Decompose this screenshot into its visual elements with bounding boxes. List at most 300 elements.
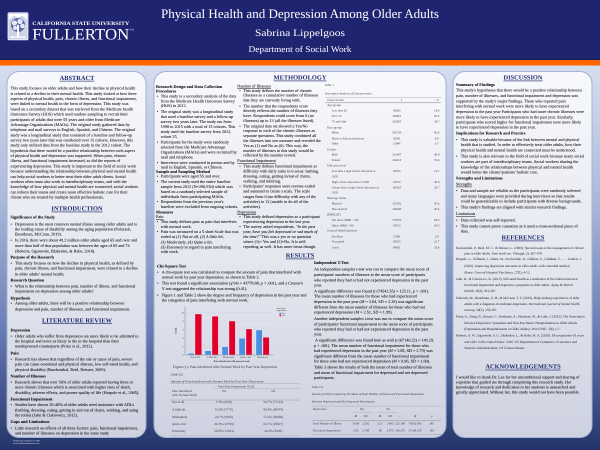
table 1: descriptive characteristics: 89601 [393, 245, 401, 249]
table 1: descriptive characteristics: Very good [332, 240, 345, 244]
table 1: descriptive characteristics: Obese (BMI > 30) [332, 223, 354, 227]
discussion text: Implications for Research and Practice [456, 131, 526, 136]
methodology column one: from the Medicare Health Outcomes Survey [161, 98, 236, 103]
discussion text: Strengths [456, 182, 472, 187]
methodology column one: based on a randomly selected sample of [161, 189, 228, 194]
table 1: descriptive characteristics: Education level [327, 164, 346, 168]
literature review text: Depression [10, 327, 31, 332]
table 1: descriptive characteristics: Excellent [332, 234, 343, 238]
table 2: pain by depression: 89.4% (60479) [263, 408, 283, 412]
methodology column one: Participants for the study were randomly [161, 140, 230, 145]
discussion text: participants who scored higher for functional impairment were more likely [456, 120, 582, 125]
abstract text: survey two years later that was conducted over 15 cohorts. However, this [10, 138, 133, 142]
independent t test text: who reported they had or had not experienced depression in the past [314, 326, 429, 331]
bar chart: pain interfered with normal work by depression: Pain interfered with normal work [214, 360, 250, 363]
discussion text: more likely to have experienced depression in the past year. Similarly, [456, 114, 574, 119]
table 1: descriptive characteristics: Race groups [327, 125, 343, 129]
chi-square test text: Chi-Square Test [157, 263, 187, 268]
methodology column one: survey two years later. The study ran from [161, 119, 232, 124]
independent t test text: participants' numbers of illnesses to the mean score of participants [314, 272, 425, 277]
table 3: t-test comparison: 74542.954 [409, 421, 422, 425]
table 3: t-test comparison: 67148.218 [409, 428, 422, 432]
table 1: descriptive characteristics: 30.8 [434, 180, 440, 184]
methodology column two: Participants' responses were reverse-coded [243, 184, 316, 189]
independent t test text: significant different from the mean number of functional impairment [314, 353, 430, 358]
discussion text: Strengths and Limitations [456, 176, 503, 181]
chi-square test text: normal work by past year depression, as shown in Table 2. [162, 275, 260, 280]
discussion text: workers are part of interdisciplinary teams. Social workers sharing the [461, 159, 579, 164]
methodology column one: with work. [161, 249, 179, 254]
discussion text: physical health and mental health are connected must be understood. [461, 147, 576, 152]
methodology column one: Sample and Sampling Method [156, 169, 211, 174]
table 1: descriptive characteristics: GED [332, 191, 339, 195]
chi-square test text: • [157, 281, 159, 286]
literature review text: Older adults who suffer from depression are more likely to be admitted to [15, 333, 138, 338]
table 1: descriptive characteristics: 14.9 [434, 109, 440, 113]
methodology column two: The original data set showed a Yes/No [243, 123, 308, 128]
table 1: descriptive characteristics: 129240 [392, 207, 402, 211]
table 2: pain by depression: Table (2) [171, 372, 183, 376]
footer credit: TEMPLATE DESIGN © 2008 [13, 440, 40, 442]
methodology column two: year, have you felt depressed or sad much of [242, 229, 318, 234]
methodology column two: illnesses) up to 13 (all the illnesses listed). [243, 118, 314, 123]
introduction text: Depression is the most common mental illness among older adults and is [15, 221, 137, 226]
panel: left column [7, 72, 146, 438]
introduction text [10, 215, 138, 311]
reference list: Prina, A., Deng, B., Brayne, C., Beekman, A., Huisman, M., & Luke, J. (2012). The Association [456, 314, 585, 318]
table 2: pain by depression: 5.3% (4042) [216, 400, 232, 404]
introduction text: Significance of the Study [10, 215, 56, 220]
chi-square test text [157, 263, 307, 302]
independent t test text: year. [314, 332, 322, 337]
table 2: pain by depression: 75.3% (30686) [263, 415, 283, 419]
discussion text: depression in the past year Participants who had more chronic illnesses were [456, 109, 584, 114]
methodology column two: and summed to create a scale. The scale [243, 189, 310, 194]
literature review text: • [10, 425, 12, 430]
table 3: t-test comparison: .96 [378, 428, 382, 432]
bar chart: pain interfered with normal work by depression: 4 [183, 337, 185, 340]
header banner [0, 0, 600, 66]
table 1: descriptive characteristics: 103393 [392, 120, 402, 124]
methodology column two: Functional Impairment [237, 158, 277, 163]
table 1: descriptive characteristics: 149961 [392, 114, 402, 118]
discussion text: to have experienced depression in the past year. [456, 125, 536, 130]
table 3: t-test comparison: 1.875 [387, 428, 394, 432]
methodology column one: This study defines pain as pain that interferes [161, 219, 237, 224]
reference list: Jahn, D., & Cukrowicz, K. (2012). Self-rated health as a moderator of the relation between [456, 277, 578, 281]
independent t test text: participants. [314, 375, 335, 380]
table 1: descriptive characteristics: 44266 [393, 109, 401, 113]
methodology column one: • [157, 174, 159, 179]
methodology column two: The survey asked respondents, "In the past [243, 224, 316, 229]
table 3: t-test comparison: t [400, 414, 401, 418]
methodology column two: activities) to 12 (unable to do all of the [243, 199, 309, 204]
discussion text: • [456, 223, 458, 228]
reference list: adults with a diagnosis of moderate depression. International journal of mental health [464, 302, 580, 306]
bar chart: pain interfered with normal work by depression: No [282, 314, 286, 317]
table 1: descriptive characteristics: Black or African American [332, 136, 365, 140]
methodology column one [156, 84, 239, 254]
methodology column one: baseline were excluded from ongoing cohorts. [161, 204, 238, 209]
introduction text: depression and pain, number of illnesses, and functional impairment. [15, 306, 130, 311]
icon: university seal with tree [8, 13, 28, 40]
table 3: t-test comparison: 2.788 [362, 428, 370, 432]
table 1: descriptive characteristics: Greater than a high school education or [332, 185, 379, 189]
table 1: descriptive characteristics: 55.4 [434, 158, 440, 162]
table 1: descriptive characteristics: General Health Question [327, 229, 358, 233]
table 3: t-test comparison: Results of T-Test Comparing the Mean of Total Number of Illness and Functional Impairment [311, 392, 424, 396]
methodology column two: have. Respondents could score from 0 (no [243, 113, 314, 118]
methodology column one: mail and telephone. [161, 155, 194, 160]
reference list [456, 246, 585, 350]
literature review text: • [10, 356, 12, 361]
methodology column two: The number that the respondents score [243, 103, 308, 108]
discussion text: Data collected was self-reported. [461, 217, 516, 222]
independent t test text: who reported they had or had not experienced depression in the past [314, 277, 429, 282]
table 1: descriptive characteristics: Good [332, 245, 339, 249]
table 3: t-test comparison: SD [364, 414, 368, 418]
discussion text [456, 82, 585, 233]
table 1: descriptive characteristics: 63913 [393, 223, 401, 227]
methodology column two: Number of Illnesses [237, 83, 271, 88]
literature review text: Number of Illnesses [10, 373, 46, 378]
methodology column one: that used a baseline survey and a follow-up [161, 114, 233, 119]
methodology column one: The current study used the entire baseline [161, 179, 231, 184]
literature review text: pain can cause emotional and physical distress, low self-rated health, and [15, 362, 138, 367]
introduction text: • [10, 301, 12, 306]
table 1: descriptive characteristics: 34.7 [434, 120, 440, 124]
heading: discussion: DISCUSSION [503, 75, 543, 82]
discussion text: and many languages were provided during interviews so that results [461, 193, 575, 198]
table 1: descriptive characteristics: 173375 [392, 218, 402, 222]
methodology column two: reflected by the number scored. [243, 153, 296, 158]
literature review text: physical disability (Brackenthal, Reid, Reisner, 2009). [15, 367, 106, 372]
methodology column two: • [239, 123, 241, 128]
table 2: pain by depression: Moderately [172, 415, 188, 419]
methodology column one: mail in English, Spanish, or Chinese. [161, 165, 223, 170]
literature review text: nondepressed counterparts (Prina et al., 2012). [15, 343, 93, 348]
chi-square test text: • [157, 269, 159, 274]
table 1: descriptive characteristics: 8.9 [435, 136, 439, 140]
literature review text: and number of illnesses on depression in the same study [15, 431, 110, 436]
methodology column one: • [157, 140, 159, 145]
independent t test text: different from the mean number of illnesses for those who had not [314, 304, 426, 309]
abstract text: workers often must also work in interdisciplinary teams, and with the [10, 179, 127, 184]
heading: literature review: LITERATURE REVIEW [42, 317, 113, 324]
introduction text: What is the relationship between pain, number of illness, and functional [15, 283, 136, 288]
table 1: descriptive characteristics: Less than 65 [332, 109, 347, 113]
table 2: pain by depression: with Normal Work [172, 393, 197, 397]
table 2: pain by depression: Past Year Depression % (f) [218, 384, 254, 388]
table 1: descriptive characteristics: GED [332, 175, 339, 179]
reference list: Statistics Administration, US Census Bureau. [464, 346, 525, 350]
methodology column one: • [157, 94, 159, 99]
reference list: between Depressive Symptoms and Non-Psychiatric Hospitalisation in Older Adults. [464, 321, 578, 325]
logo wordmark: CALIFORNIA STATE UNIVERSITY [32, 21, 130, 27]
literature review text: Functional Impairment [10, 396, 53, 401]
table 3: t-test comparison: .001 [429, 428, 435, 432]
methodology column one: Pain was measured on a 5 short Scale that was [161, 229, 239, 234]
methodology column two: the time?" This was a yes or no question [243, 234, 312, 239]
heading: methodology: METHODOLOGY [274, 75, 327, 82]
methodology column one: • [157, 229, 159, 234]
chi-square test text: V test suggested the relationship was strong (0.41). [162, 286, 247, 291]
table 3: t-test comparison: 2.51 [377, 421, 383, 425]
methodology column one: Participants were aged 55 and over. [161, 174, 220, 179]
reference list: Polacsek, M., Boardman, G. H., & McCann, T. V. (2019). Help-seeking experiences of older [456, 296, 581, 300]
table 1: descriptive characteristics: 85.4 [434, 131, 440, 135]
methodology column two: • [239, 88, 241, 93]
chi-square test text: A chi-square test was calculated to compare the amount of pain that interfered with [162, 269, 302, 274]
methodology column one: • [157, 199, 159, 204]
discussion text: • [456, 137, 458, 142]
table 1: descriptive characteristics: f [401, 98, 403, 102]
acknowledgements text: knowledge of research and dedication to her students is unmatched and [456, 385, 576, 390]
table 3: t-test comparison: Table (3) [312, 385, 323, 389]
independent t test text: had experienced depression in the past year (M = 2.85, SD = 2.79) was [314, 348, 433, 353]
table 2: pain by depression: 39.3% (18799) [214, 422, 234, 426]
abstract text: because understanding the relationship between physical and mental health [10, 169, 137, 174]
table 1: descriptive characteristics: Female [332, 158, 341, 162]
table 2: pain by depression: No [271, 389, 276, 393]
methodology column one: This study is a secondary analysis of the data [161, 94, 236, 99]
independent t test text: An independent samples t-test was run to compare the mean score of [314, 266, 430, 271]
abstract text: can help social workers to better treat their older adult clients. Social [10, 174, 126, 179]
methodology column two: This study defined depression as a participant [243, 214, 321, 219]
bar chart: pain interfered with normal work by depression: Quite a bit [240, 356, 251, 359]
table 2: pain by depression: Extremely [172, 429, 186, 433]
introduction text: Hypothesis [10, 295, 31, 300]
department: Department of Social Work [248, 44, 352, 54]
table 1: descriptive characteristics: Less than a high school education or [332, 169, 376, 173]
chi-square test text: This test found a significant association (χ²(4) = 43778.88, p < .001), and a Cramer's [162, 281, 303, 286]
table 1: descriptive characteristics: Characteristic [327, 98, 345, 102]
table 1: descriptive characteristics: 13996 [393, 142, 401, 146]
table 1: descriptive characteristics: 91272 [393, 180, 401, 184]
methodology column two: dressing, eating, getting in/out of chairs, [243, 173, 311, 178]
table 3: t-test comparison: 149.279 [395, 428, 405, 432]
table 2: pain by depression: 60.7% (29027) [263, 422, 283, 426]
discussion text: health that is studied. In order to effectively treat older adults, how their [461, 142, 582, 147]
literature review text: Pain [10, 351, 19, 356]
literature review text: disability, adverse effects, and poorer quality of life (Harpole et al., 2005). [15, 390, 139, 395]
introduction text: in older adults' mental health. [15, 271, 64, 276]
title: Physical Health and Depression Among Older Adults [161, 6, 439, 21]
table 1: descriptive characteristics: 33.4 [434, 245, 440, 249]
table 3: t-test comparison: M [353, 414, 357, 418]
methodology column two: reporting as well. It has more items though. [243, 244, 316, 249]
methodology column one: selected from the Medicare Advantage [161, 145, 225, 150]
independent t test text: p < .001). The mean number of functional impairment for those who [313, 343, 429, 348]
abstract text: based on a secondary dataset that was retrieved from the Medicare health [10, 106, 134, 111]
independent t test text: The mean number of illnesses for those who had experienced [314, 294, 418, 299]
bar chart: pain interfered with normal work by depression: 2 [183, 345, 185, 348]
literature review text: (bathing, dressing, eating, getting in and out of chairs, walking, and using [15, 407, 139, 412]
methodology column one: • [157, 109, 159, 114]
table 2: pain by depression: 10.6% (7178) [215, 408, 233, 412]
discussion text: pain, number of illnesses, and functional impairment and depression was [456, 93, 578, 98]
table 1: descriptive characteristics: 5.9 [435, 234, 439, 238]
bar chart: pain interfered with normal work by depression: 0 [183, 354, 185, 357]
table 1: descriptive characteristics: 135192 [392, 201, 402, 205]
introduction text: more than half of that population was between the ages of 65 and 74 [15, 243, 130, 248]
table 1: descriptive characteristics: BMI(CAT) [327, 212, 341, 216]
abstract text: of physical health and depression was supported. When pain, chronic [10, 153, 127, 158]
table 1: descriptive characteristics: Table 1 [325, 83, 334, 87]
bar chart: pain interfered with normal work by depression: Not at all [190, 356, 200, 359]
literature review text: • [10, 402, 12, 407]
discussion text: supported by the study's major findings. Those who reported pain [456, 98, 567, 103]
literature review text: Research has shown that regardless of the site or cause of pain, severe [15, 356, 132, 361]
methodology column one: (5) Extremely in regard to pain interfering [161, 244, 232, 249]
literature review text: Studies have shown 20-40% of older adults need assistance with ADLs [15, 402, 134, 407]
independent t test text: of participants' functional impairment to the mean score of participants [314, 321, 433, 326]
abstract text: participants of adults that were 55 years and older from Medicare [10, 117, 120, 122]
independent t test text: A significant difference was found (t (74542.55) = 125.11, p < .001). [314, 288, 429, 293]
methodology column two: walking, and toileting. [243, 178, 281, 183]
bar chart: pain interfered with normal work by depression: Depression [276, 309, 287, 312]
abstract text: Outcomes Survey (HOS) which used random sampling to recruit their [10, 112, 128, 117]
methodology column one: individuals from participating MAOs. [161, 194, 224, 199]
methodology column one: Measures [156, 209, 174, 214]
panel: methodology and results [154, 72, 446, 438]
methodology column two: the illnesses into one measure and recoded the [243, 138, 321, 143]
abstract text: telephone and mail surveys in English, Spanish, and Chinese. The original [10, 127, 136, 132]
methodology column one: Respondents from the previous year's [161, 199, 224, 204]
methodology column one: • [157, 179, 159, 184]
abstract text: hypothesis that there would be a positive relationship between each aspect [10, 148, 136, 153]
reference list: Harpole, L., Williams, J., Olsen, M., Stechuchak, K., Oddone, E., Callahan, C., . . . Unützer, J. [456, 257, 582, 261]
methodology column two: experiencing depression in the last year. [243, 219, 310, 224]
methodology column one: with normal work. [161, 224, 192, 229]
methodology column two: where (1)= Yes and (2)=No. It is self- [243, 239, 307, 244]
reference list: illness. General Hospital Psychiatry, 27(1), 4-12. [464, 270, 530, 274]
chi-square test text: the categories of pain interfering with normal work. [162, 297, 248, 302]
table 1: descriptive characteristics: Descriptive Analysis of Characteristics [324, 91, 373, 95]
table 1: descriptive characteristics: 75 and older [332, 120, 347, 124]
methodology column one: cohort 15. [161, 134, 178, 139]
reference list: functional impairment and depressive symptoms in older adults. Aging & Mental [464, 283, 573, 287]
independent t test text [313, 260, 434, 380]
bar chart: pain interfered with normal work by depression: A little bit [207, 356, 217, 359]
independent t test text: experienced depression (M = 2.51, SD = 1.99). [314, 310, 393, 315]
chi-square test text: Figure 1 and Table 2 show the degree and frequency of depression in the past year and [162, 292, 307, 297]
independent t test text: Independent T-Test [314, 260, 349, 265]
table 1: descriptive characteristics: 26091 [393, 136, 401, 140]
literature review text: • [10, 379, 12, 384]
discussion text: interfering with normal work were more likely to have experienced [456, 104, 570, 109]
methodology column two: illnesses as a cumulative number of illnesses [243, 93, 319, 98]
footer credit [13, 440, 40, 445]
methodology column one: (HOS) in 2012. [161, 103, 187, 108]
literature review text: Little research on effects of all three factors: pain, functional impairment, [15, 425, 138, 430]
methodology column one: The original study was a longitudinal study [161, 109, 234, 114]
table 1: descriptive characteristics: 21.7 [434, 240, 440, 244]
reference list: Roberts, A. W., Ogunwole, S. U., Blakeslee, L., & Rabe, M. A. (2018). The population 65 years [456, 334, 585, 338]
reference list: Brackenthal, P., Reid, M. C., & Reisner, L. (2009). Special issues in the management of chronic [456, 246, 585, 250]
table 3: t-test comparison: 125.108 [395, 421, 405, 425]
table 1: descriptive characteristics: 4.7 [435, 142, 439, 146]
table 1: descriptive characteristics: 26.5 [434, 223, 440, 227]
methodology column one: • [157, 219, 159, 224]
table 3: t-test comparison [311, 385, 441, 435]
methodology column two: ranges from 0 (no difficulty with any of the [243, 194, 316, 199]
table 3: t-test comparison: 2.85 [353, 428, 359, 432]
table 1: descriptive characteristics: 58.2 [434, 218, 440, 222]
author: Sabrina Lippelgoos [255, 28, 345, 39]
abstract text: were linked to mental health in the form of depression. This study was [10, 101, 129, 106]
discussion text: This study cannot prove causation as it used a cross-sectional piece of [461, 223, 578, 228]
methodology column two: difficulty with daily tasks in 6 areas: bathing, [243, 168, 319, 173]
abstract text: knowledge of how physical and mental health are connected, social workers [10, 184, 138, 189]
introduction text: Research Question [10, 277, 45, 282]
reference list: and older in the United States: 2016. US Department of Commerce, Economics and [464, 340, 577, 344]
reference list: (Depression and Hospitalisation in Older Adults). PLoS ONE, 7(4), 1-7. [464, 327, 561, 331]
table 3: t-test comparison: 1.895 [387, 421, 394, 425]
discussion text: • [456, 188, 458, 193]
reference list: nursing, 28(1), 278-287. [464, 308, 497, 312]
introduction text: impairment on depression among older adults? [15, 289, 94, 294]
introduction text: • [10, 238, 12, 243]
table 3: t-test comparison: Depression [313, 407, 327, 411]
table 2: pain by depression: Not at all [172, 400, 184, 404]
table 1: descriptive characteristics [324, 83, 441, 249]
table 1: descriptive characteristics: White [332, 131, 340, 135]
table 1: descriptive characteristics: Not obese (BMI < 30) [332, 218, 358, 222]
methodology column one: Organizations (MAOs) and were recruited by [161, 150, 238, 155]
table 1: descriptive characteristics: 65 to 74 [332, 114, 342, 118]
methodology column two: • [239, 103, 241, 108]
introduction text: the leading cause of disability among the aging population (Polacsek, [15, 226, 131, 231]
table 1: descriptive characteristics: 43.4 [434, 207, 440, 211]
literature review text [10, 327, 139, 436]
table 3: t-test comparison: df [414, 414, 417, 418]
literature review text: • [10, 333, 12, 338]
literature review text: more chronic illnesses which is associated with higher rates of death, [15, 385, 131, 390]
panel: discussion, references, acknowledgements [453, 72, 592, 438]
discussion text: data. [461, 228, 469, 233]
methodology column two: Depression [237, 209, 257, 214]
bar chart: pain interfered with normal work by depression: Past Year [277, 307, 285, 310]
methodology column one: Research Design and Data Collection [156, 84, 223, 89]
logo wordmark [32, 21, 135, 43]
discussion text: This study is valuable because of the link between mental and physical [461, 137, 580, 142]
discussion text: This study's hypotheses that there would be a positive relationship between [456, 88, 583, 93]
heading: references: REFERENCES [502, 235, 545, 242]
methodology column two: separate questions. This study combined all [243, 133, 317, 138]
methodology column two: • [239, 214, 241, 219]
independent t test text: Another independent samples t-test was run to compare the mean score [314, 316, 433, 321]
methodology column two: Yes as (1) and No as (0). This way, the [243, 143, 308, 148]
discussion text: • [456, 205, 458, 210]
table 1: descriptive characteristics: 40.9 [434, 153, 440, 157]
table 1: descriptive characteristics: 62765 [393, 169, 401, 173]
table 1: descriptive characteristics: 45.4 [434, 201, 440, 205]
acknowledgements text: expertise that guided me through completing this research study. Her [456, 380, 572, 385]
footer credit: www.PosterPresentations.com [13, 442, 40, 445]
logo wordmark: FULLERTON [32, 26, 130, 43]
discussion text: could be generalizable to include participants with diverse backgrounds. [461, 199, 582, 204]
table 1: descriptive characteristics: Marriage Status [327, 196, 347, 200]
abstract text: illness, and functional impairment increased, so did the reports of [10, 158, 121, 163]
abstract text: experiencing depression. This study is important to the field of social work [10, 163, 137, 168]
methodology column two: activities). [243, 204, 261, 209]
table 3: t-test comparison: Yes [360, 407, 365, 411]
abstract text [10, 86, 138, 200]
methodology column one: • [157, 160, 159, 165]
table 1: descriptive characteristics: 164112 [392, 158, 402, 162]
table 2: pain by depression: A little bit [172, 408, 185, 412]
